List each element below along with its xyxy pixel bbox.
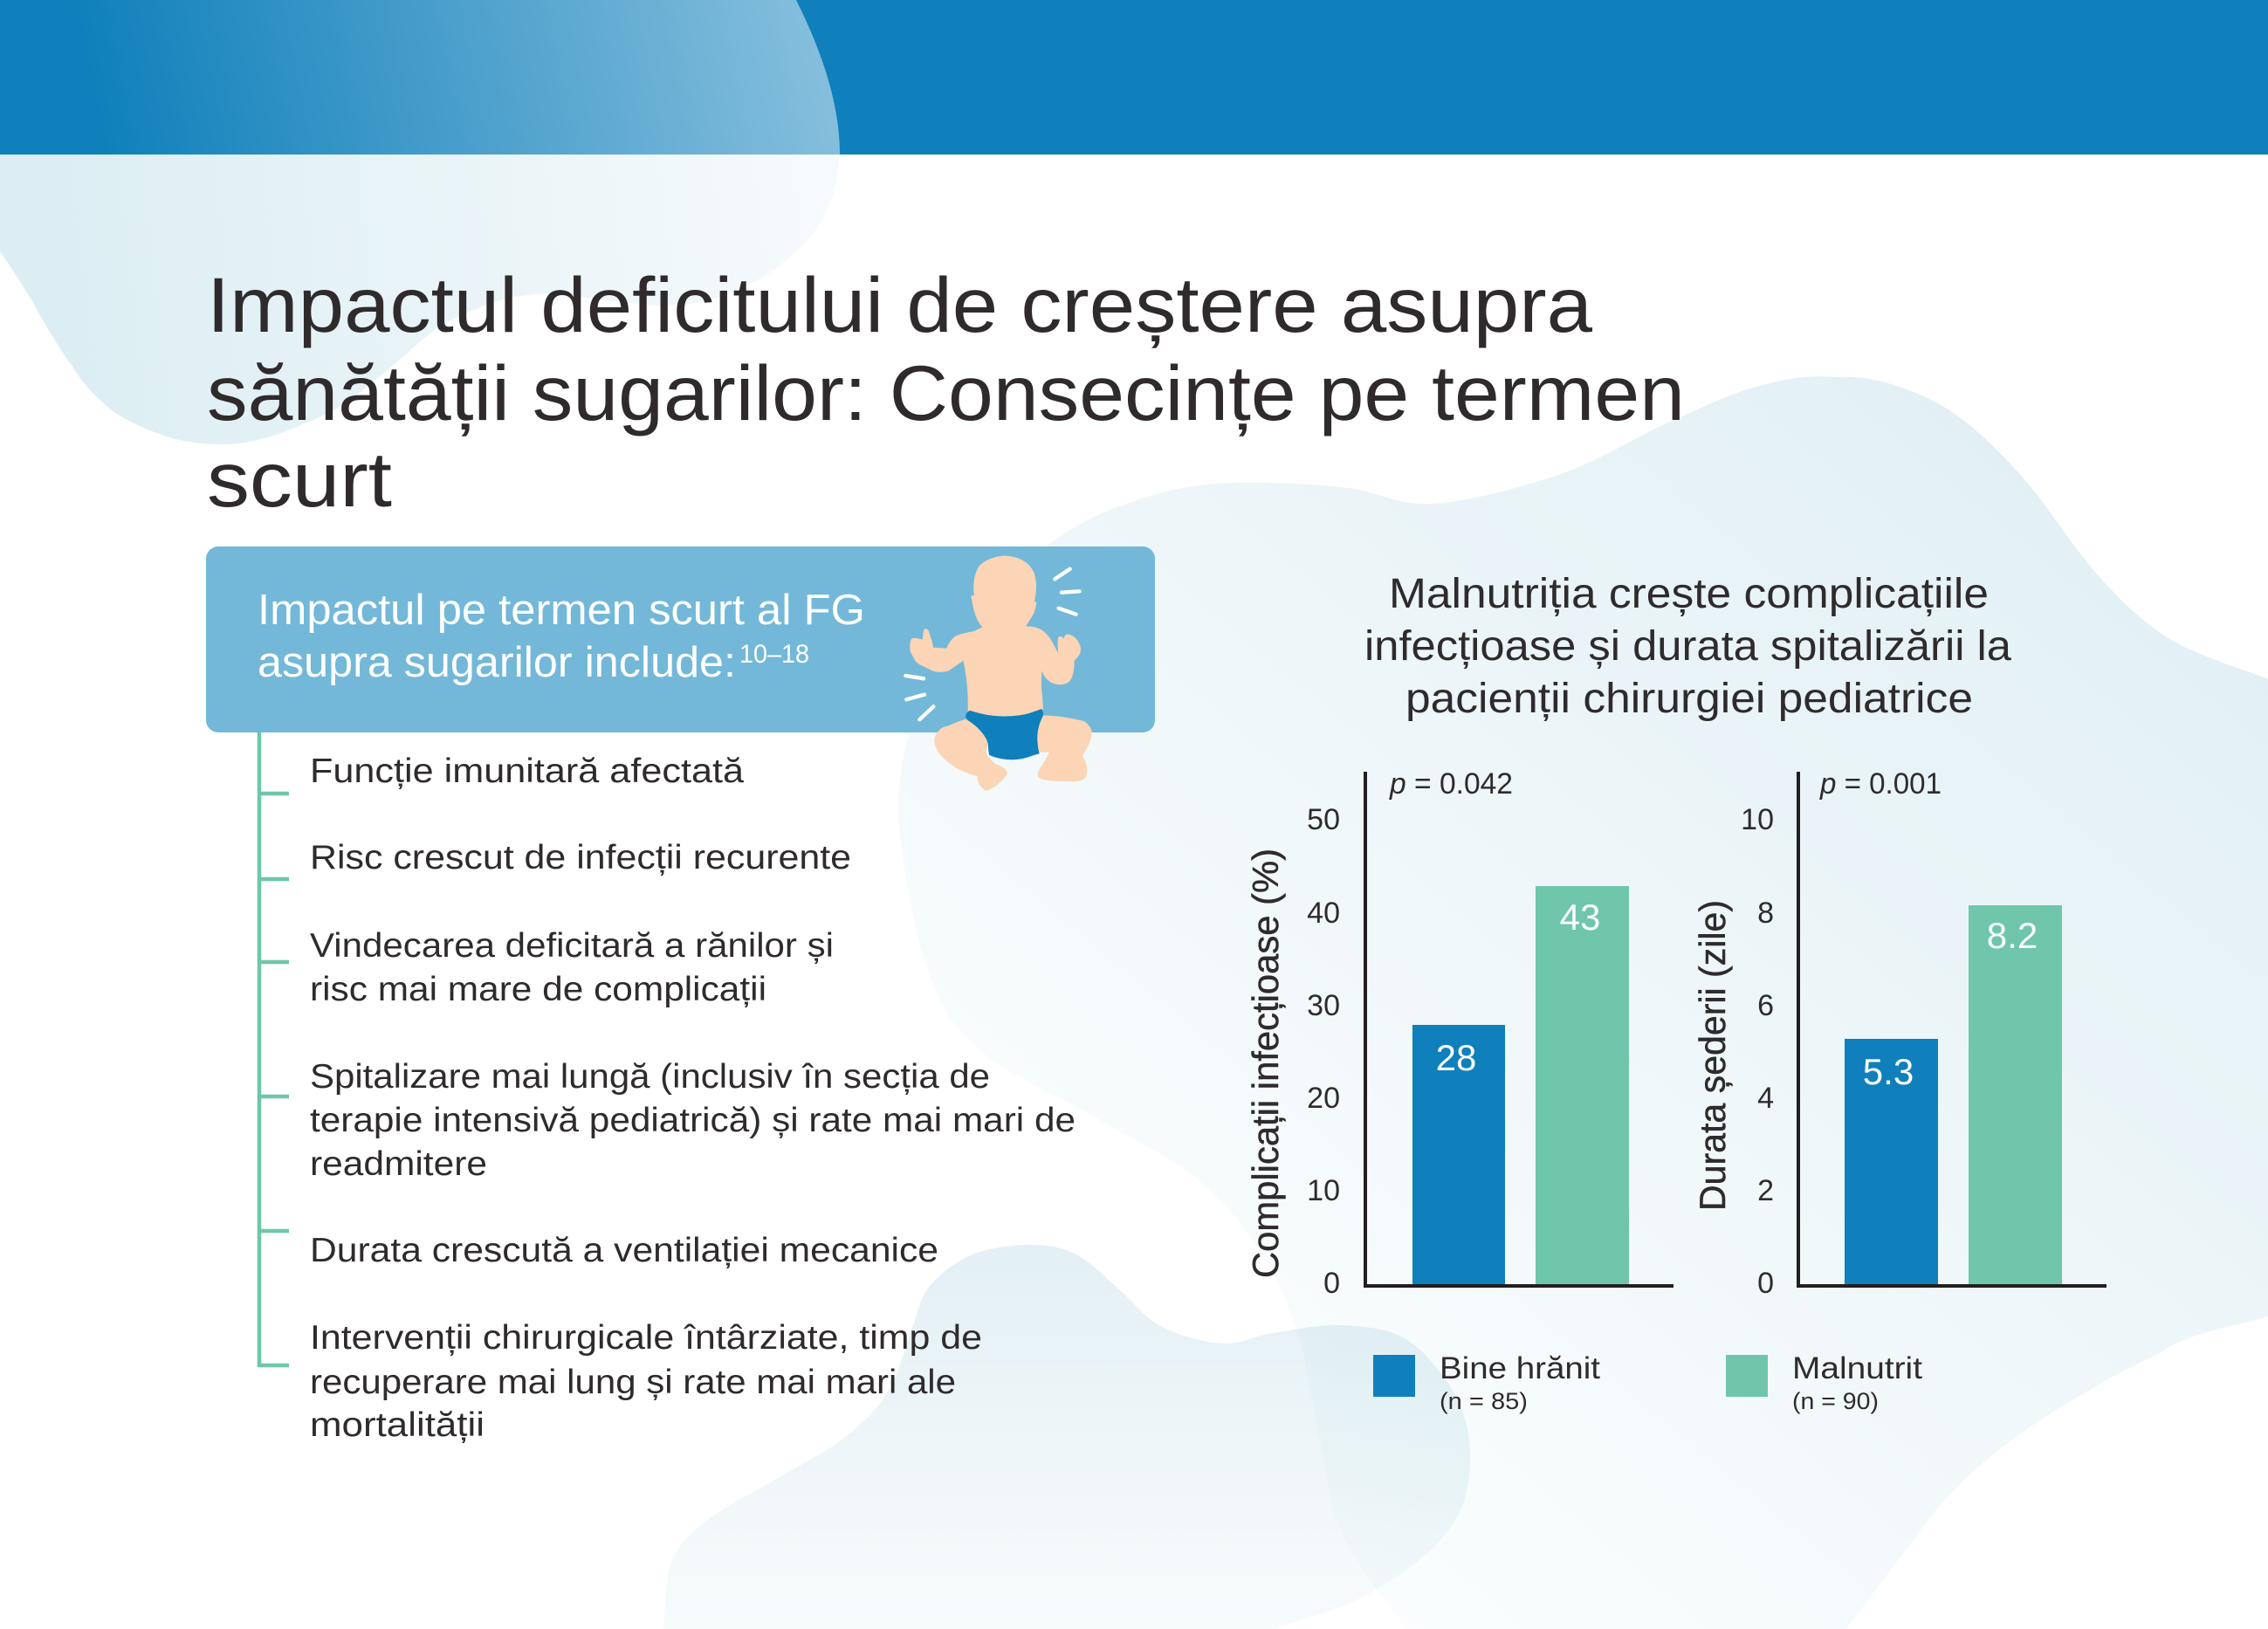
bar chart: length of stay <box>1692 767 2106 1300</box>
bar chart: length of stay: 8.2 <box>1987 915 2038 956</box>
bar chart: length of stay: p = 0.001 <box>1819 767 1942 801</box>
panel: short-term impact header: asupra sugarilor include: <box>258 639 736 686</box>
bar chart: infectious complications: 28 <box>1436 1037 1476 1078</box>
legend: Bine hrănit <box>1440 1351 1600 1385</box>
bar chart: infectious complications: 30 <box>1307 989 1340 1022</box>
list of short-term impacts: Risc crescut de infecții recurente <box>310 839 851 876</box>
list of short-term impacts <box>310 753 1076 1444</box>
legend: (n = 85) <box>1440 1388 1528 1414</box>
list of short-term impacts: Intervenții chirurgicale întârziate, timp de <box>310 1319 982 1357</box>
bar chart: infectious complications: 0 <box>1323 1267 1340 1300</box>
bar chart: infectious complications <box>1245 767 1674 1300</box>
title <box>207 261 1685 523</box>
legend <box>1373 1351 1922 1414</box>
panel: short-term impact header: Impactul pe termen scurt al FG <box>258 587 865 634</box>
bar chart: infectious complications: 40 <box>1307 897 1340 930</box>
list of short-term impacts: Vindecarea deficitară a rănilor și <box>310 927 834 965</box>
list of short-term impacts: risc mai mare de complicații <box>310 971 766 1008</box>
background blob: top left <box>0 0 840 444</box>
icon: baby <box>905 556 1092 791</box>
legend: (n = 90) <box>1792 1388 1879 1414</box>
panel: short-term impact header: 10–18 <box>739 640 809 669</box>
list of short-term impacts: terapie intensivă pediatrică) și rate mai mari de <box>310 1102 1076 1139</box>
bar chart: length of stay: 0 <box>1757 1267 1774 1300</box>
header band <box>0 0 2268 155</box>
bar chart: infectious complications: 50 <box>1307 803 1340 836</box>
bar chart: length of stay: 8 <box>1757 897 1774 930</box>
bar chart: infectious complications: 10 <box>1307 1174 1340 1207</box>
bar chart: length of stay: 10 <box>1741 803 1774 836</box>
panel: short-term impact header <box>206 546 1155 732</box>
bar chart: infectious complications: Complicații infecțioase (%) <box>1245 849 1286 1278</box>
list of short-term impacts: recuperare mai lung și rate mai mari ale <box>310 1364 956 1401</box>
bar chart: length of stay: 2 <box>1757 1174 1774 1207</box>
bar chart: infectious complications: 43 <box>1560 897 1600 938</box>
bar chart: length of stay: 6 <box>1757 989 1774 1022</box>
chart title: infecțioase și durata spitalizării la <box>1364 623 2011 670</box>
bar chart: infectious complications: 20 <box>1307 1082 1340 1115</box>
list of short-term impacts: readmitere <box>310 1145 487 1183</box>
title: sănătății sugarilor: Consecințe pe termen <box>207 349 1685 436</box>
bar chart: length of stay: 4 <box>1757 1082 1774 1115</box>
list of short-term impacts: Spitalizare mai lungă (inclusiv în secția de <box>310 1058 990 1096</box>
legend: Malnutrit <box>1792 1351 1922 1385</box>
chart title: Malnutriția crește complicațiile <box>1389 571 1989 617</box>
title: Impactul deficitului de creștere asupra <box>207 261 1593 348</box>
connector tree <box>258 732 289 1367</box>
bar chart: infectious complications: p = 0.042 <box>1389 767 1513 801</box>
background blob: bottom <box>663 1245 1470 1629</box>
background blob: large right <box>898 376 2268 1629</box>
list of short-term impacts: Funcție imunitară afectată <box>310 753 744 790</box>
title: scurt <box>207 436 392 523</box>
chart title <box>1364 571 2011 722</box>
bar chart: length of stay: 5.3 <box>1863 1051 1914 1092</box>
chart title: pacienții chirurgiei pediatrice <box>1405 676 1973 722</box>
bar chart: length of stay: Durata șederii (zile) <box>1692 900 1733 1211</box>
list of short-term impacts: mortalității <box>310 1406 485 1444</box>
list of short-term impacts: Durata crescută a ventilației mecanice <box>310 1232 938 1269</box>
